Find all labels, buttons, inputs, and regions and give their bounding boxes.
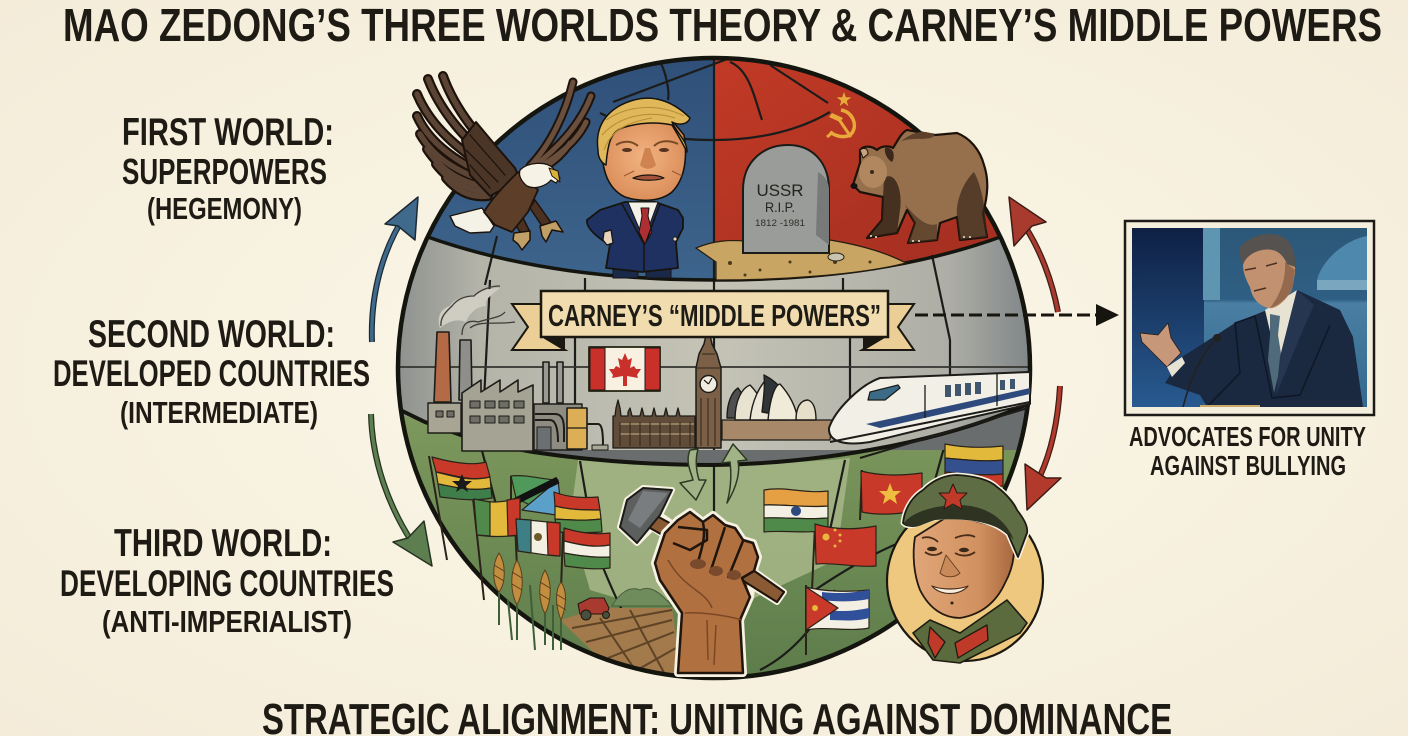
fist halo	[655, 512, 758, 673]
legs	[613, 268, 671, 278]
flag: china	[815, 524, 876, 566]
red collar tabs	[928, 627, 945, 658]
flag: tanzania	[511, 476, 562, 516]
collar and jacket	[913, 600, 1027, 663]
cap	[903, 475, 1027, 557]
flag: mexico	[516, 519, 560, 556]
flag: vietnam	[861, 471, 922, 514]
globe outline	[398, 58, 1030, 678]
flag: cuba	[806, 587, 869, 630]
globe grid lines	[398, 58, 1030, 680]
hammer white halo	[620, 488, 784, 602]
nose	[940, 555, 960, 577]
flag poles	[429, 456, 862, 655]
shirt and tie	[628, 202, 658, 240]
icon: hammer and sickle with star	[827, 91, 854, 137]
label: second world	[53, 313, 370, 430]
label: first world	[122, 111, 334, 226]
caption: advocates for unity	[1129, 421, 1366, 481]
label: second world: SECOND WORLD:	[88, 313, 335, 356]
arrow: red upper right	[1009, 197, 1058, 312]
icon: usssr tombstone with dirt mound	[696, 145, 906, 280]
tie	[1268, 314, 1282, 393]
label: second world: DEVELOPED COUNTRIES	[53, 353, 370, 394]
icon: brown bear	[850, 130, 987, 243]
third world flags	[429, 444, 1003, 655]
icon: usssr tombstone with dirt mound: USSR	[756, 181, 804, 200]
bullet train	[829, 372, 1030, 443]
sydney opera house	[722, 412, 832, 440]
head	[1243, 250, 1296, 308]
label: third world: (ANTI-IMPERIALIST)	[102, 604, 352, 639]
small exchange arrows	[680, 444, 747, 503]
cap star	[939, 484, 967, 509]
lapel	[1276, 290, 1314, 395]
finger lines	[673, 523, 743, 578]
label: first world: SUPERPOWERS	[122, 151, 327, 192]
hills	[612, 588, 672, 606]
canadian flag	[589, 347, 660, 391]
nose	[640, 148, 656, 169]
layer: first world red half	[715, 60, 998, 278]
podium edge	[1200, 405, 1260, 407]
icon: small red tractor	[578, 598, 610, 620]
hammer head	[620, 488, 672, 543]
head	[519, 163, 560, 188]
hammer handle	[650, 515, 784, 602]
hammer handle exit	[742, 566, 784, 602]
left wing feathers	[417, 76, 512, 196]
band outlines	[396, 402, 1032, 465]
cap visor	[904, 505, 1014, 540]
icon: usssr tombstone with dirt mound: R.I.P.	[765, 199, 795, 215]
flag: venezuela	[945, 444, 1003, 487]
suit	[1165, 290, 1363, 407]
chimneys	[434, 332, 451, 402]
industrial skyline	[428, 286, 1030, 458]
flag: red white green	[564, 528, 610, 569]
mouth	[932, 586, 968, 594]
big ben	[696, 326, 721, 448]
hair	[597, 98, 690, 165]
facial features	[922, 535, 975, 556]
photo: carney at podium	[1125, 221, 1374, 415]
layer: third world green	[404, 416, 1016, 674]
brows eyes	[616, 141, 678, 146]
label: first world: (HEGEMONY)	[147, 191, 302, 226]
hair	[1240, 234, 1295, 267]
label: third world: THIRD WORLD:	[114, 522, 332, 565]
dashed arrow to carney photo	[915, 304, 1119, 326]
flag: red yellow green	[554, 492, 602, 533]
lighter green region	[570, 458, 850, 600]
globe with three layers	[390, 50, 1040, 690]
second world ground	[538, 407, 1026, 463]
icon: usssr tombstone with dirt mound: 1812 -1981	[755, 218, 805, 229]
right wing feathers	[530, 82, 591, 170]
mouth	[633, 175, 664, 180]
arrow: blue rising	[372, 197, 418, 342]
banner: carney's middle powers	[512, 291, 914, 351]
tail	[450, 208, 494, 233]
suit	[587, 202, 683, 272]
flag: india	[764, 489, 828, 532]
fist	[655, 512, 758, 673]
flag: senegal	[474, 498, 520, 536]
banner: carney's middle powers: CARNEY’S “MIDDLE POWERS”	[548, 298, 881, 333]
medallion disc	[887, 501, 1043, 661]
arrow: green descending	[371, 414, 432, 566]
legs	[510, 200, 552, 232]
face	[914, 515, 1014, 618]
farm field furrows	[562, 608, 676, 674]
layer: second world band	[400, 239, 1028, 450]
arrow: red lower right	[1025, 386, 1061, 510]
palace of westminster	[613, 400, 695, 448]
body	[484, 172, 538, 232]
portrait: mao medallion	[887, 475, 1043, 663]
wrist creases	[668, 560, 742, 665]
knuckle shadows	[690, 559, 741, 580]
flag: ghana	[432, 457, 492, 500]
hands	[603, 230, 613, 245]
smoke	[439, 286, 515, 335]
layer: first world blue half	[430, 60, 713, 278]
shirt	[1265, 290, 1297, 357]
face	[602, 118, 686, 200]
wheat crops	[494, 553, 566, 650]
icon: raised fist with hammer	[620, 488, 784, 673]
label: third world	[60, 522, 394, 639]
hand and cuff	[1140, 323, 1181, 367]
label: third world: DEVELOPING COUNTRIES	[60, 563, 394, 604]
figure: trump caricature	[587, 98, 690, 278]
microphone	[1183, 342, 1213, 407]
label: first world: FIRST WORLD:	[122, 111, 334, 154]
icon: eagle	[417, 76, 591, 250]
label: second world: (INTERMEDIATE)	[120, 395, 318, 430]
factory buildings	[428, 403, 461, 433]
